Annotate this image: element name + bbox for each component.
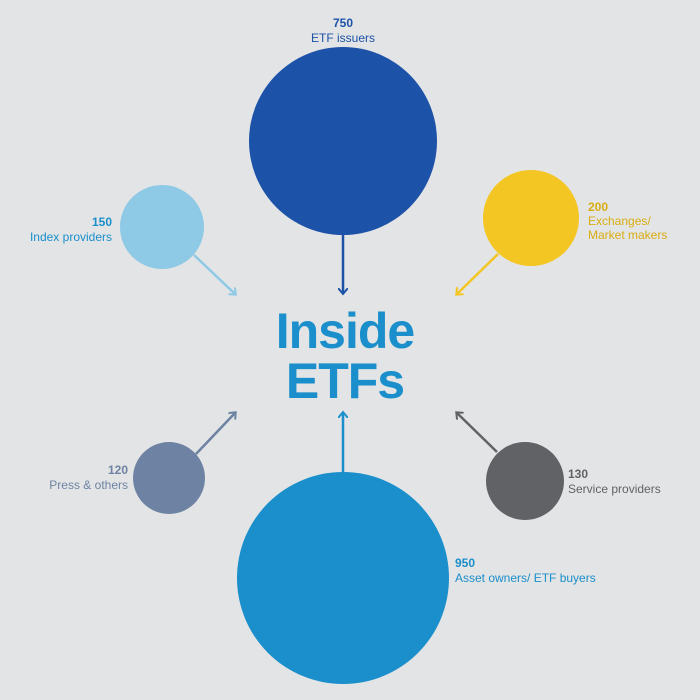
title: ETFs bbox=[286, 353, 404, 409]
circle: Service providers: Service providers bbox=[568, 482, 661, 496]
circle: Exchanges bbox=[483, 170, 667, 266]
title: Inside bbox=[276, 303, 414, 359]
circle: Asset owners: 950 bbox=[455, 556, 475, 570]
circle: Service providers bbox=[486, 442, 661, 520]
circle: Press: Press & others bbox=[49, 478, 128, 492]
circle: ETF issuers: 750 bbox=[333, 16, 353, 30]
circle: Exchanges: Exchanges/ bbox=[588, 214, 651, 228]
circle: Index providers: Index providers bbox=[30, 230, 112, 244]
circle: Index providers bbox=[30, 185, 204, 269]
arrows bbox=[194, 235, 498, 472]
circle: Asset owners: Asset owners/ ETF buyers bbox=[455, 571, 596, 585]
circle: ETF issuers bbox=[249, 16, 437, 235]
circle: Service providers: 130 bbox=[568, 467, 588, 481]
circle: ETF issuers: ETF issuers bbox=[311, 31, 375, 45]
circle: Index providers: 150 bbox=[92, 215, 112, 229]
circle: Exchanges: 200 bbox=[588, 200, 608, 214]
circle: Exchanges: Market makers bbox=[588, 228, 667, 242]
circle: Press: 120 bbox=[108, 463, 128, 477]
circle: Asset owners bbox=[237, 472, 596, 684]
title bbox=[276, 303, 414, 409]
circle: Press bbox=[49, 442, 205, 514]
